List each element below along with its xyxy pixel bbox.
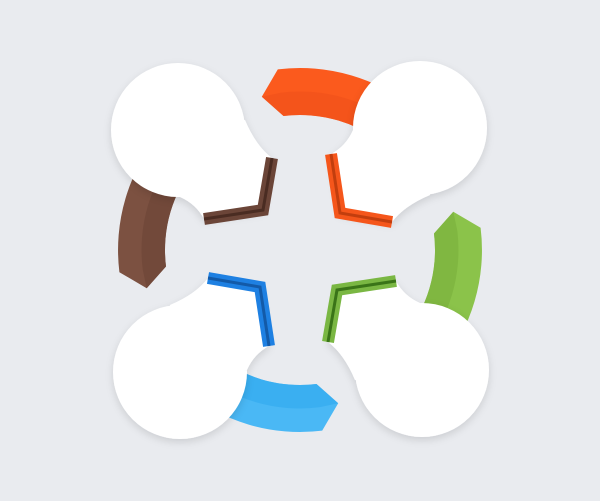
arrow band: orange — [262, 68, 417, 147]
bracket: orange — [331, 154, 392, 222]
arrow band: blue — [183, 353, 338, 432]
bulbs — [111, 61, 489, 439]
bracket: green — [328, 281, 396, 342]
bracket: brown — [204, 158, 272, 219]
bulb: top-right — [331, 61, 487, 222]
bracket: blue — [208, 278, 269, 346]
bulb: bottom-right — [328, 281, 489, 437]
bulb: top-left — [111, 63, 272, 219]
arrow band: green — [403, 212, 482, 367]
arrow band: brown — [118, 133, 197, 288]
bulb: bottom-left — [113, 278, 269, 439]
